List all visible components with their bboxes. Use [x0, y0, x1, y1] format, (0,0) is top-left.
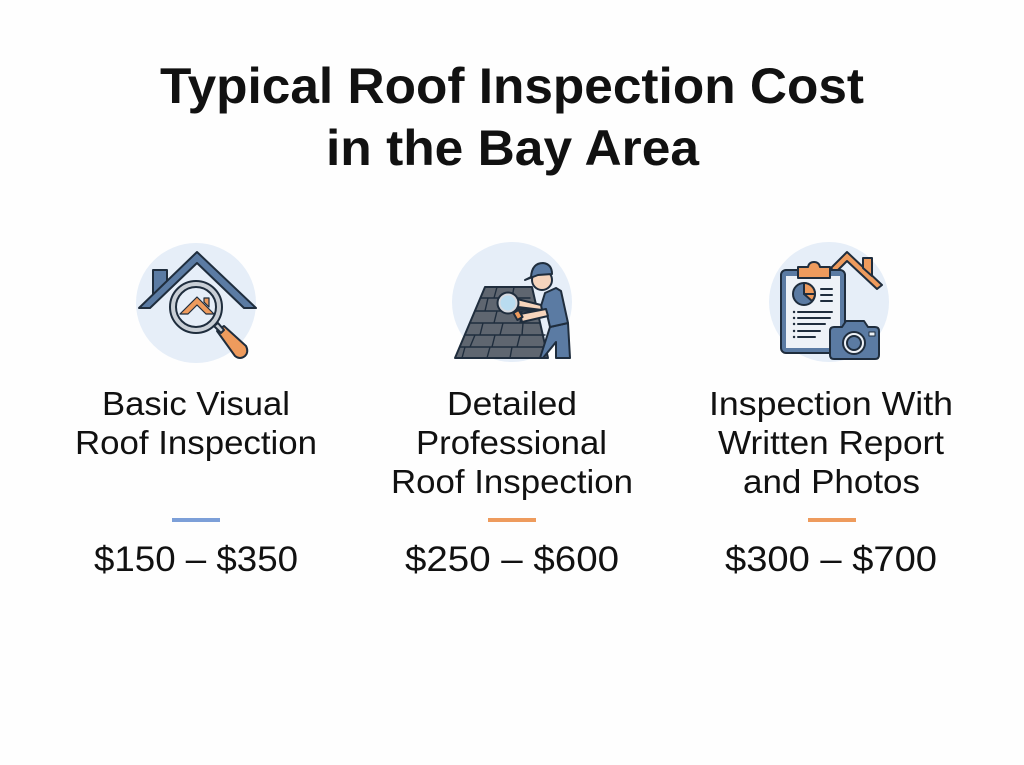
heading: Roof Inspection: [391, 463, 633, 500]
title: Typical Roof Inspection Cost: [160, 58, 864, 114]
heading: Basic Visual: [102, 385, 290, 422]
divider bar: [488, 518, 536, 522]
heading: Written Report: [718, 424, 944, 461]
icon: house roof with magnifying glass: [136, 243, 256, 363]
heading: Professional: [416, 424, 607, 461]
heading: Roof Inspection: [75, 424, 317, 461]
heading: [391, 385, 633, 500]
title: in the Bay Area: [326, 120, 700, 176]
icon: inspector on shingled roof: [452, 242, 572, 362]
panel: basic visual roof inspection: [75, 243, 317, 579]
icon: clipboard, house and camera: [769, 242, 889, 362]
title: [160, 58, 864, 176]
heading: Inspection With: [709, 385, 953, 422]
panel: inspection with written report and photos: [709, 242, 953, 579]
price: $300 – $700: [725, 540, 937, 579]
price: $250 – $600: [405, 540, 619, 579]
heading: [709, 385, 953, 500]
heading: [75, 385, 317, 461]
heading: Detailed: [447, 385, 577, 422]
heading: and Photos: [743, 463, 920, 500]
divider bar: [808, 518, 856, 522]
divider bar: [172, 518, 220, 522]
panel: detailed professional roof inspection: [391, 242, 633, 579]
price: $150 – $350: [94, 540, 298, 579]
